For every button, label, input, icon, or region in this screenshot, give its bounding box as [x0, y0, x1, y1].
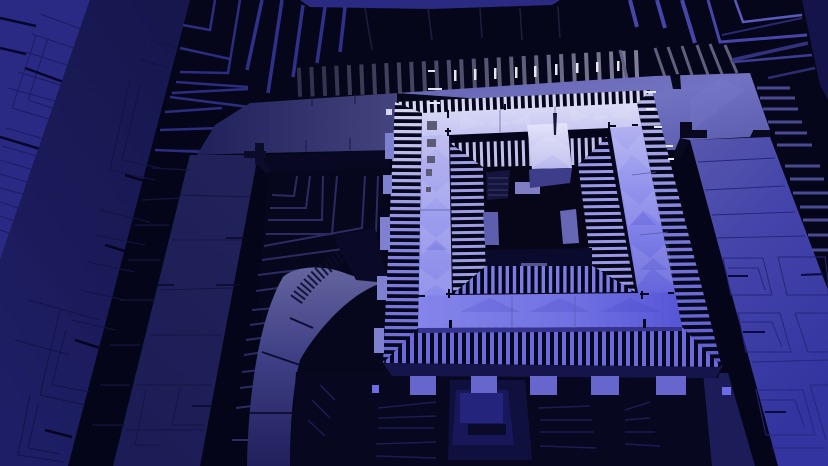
panel: top dark structure with struts	[155, 0, 816, 153]
panel: curved arch	[247, 228, 388, 466]
panel: lit slab top right	[397, 73, 770, 150]
white highlights on strip row	[428, 61, 620, 90]
panel: right lit slab	[690, 137, 828, 466]
top-right gray diagonals	[620, 44, 737, 78]
inner stripe band: left	[468, 140, 470, 298]
inner stripes base	[450, 128, 638, 295]
stripe band: right	[678, 85, 682, 375]
studs on ring	[426, 121, 437, 192]
inner stripe band: bottom	[455, 266, 632, 294]
panel: far left bright band	[0, 0, 90, 260]
strip row above chip	[285, 68, 645, 83]
central cube	[527, 113, 572, 188]
inner block left	[483, 212, 499, 245]
panel: chip	[372, 85, 731, 395]
gap ticks between bands	[92, 150, 200, 425]
panel: bottom chip socket	[290, 372, 755, 466]
panel: chevron struts left of chip	[232, 168, 388, 466]
top-right chevron struts	[630, 0, 815, 78]
white marks top right	[428, 91, 674, 160]
stripe band: bottom	[386, 327, 718, 367]
chip base	[383, 90, 722, 378]
inner stripe band: top	[445, 150, 612, 155]
central well	[483, 165, 591, 266]
ring seams	[420, 106, 668, 328]
ring pyramid facets	[420, 106, 674, 295]
light ring	[418, 103, 682, 333]
inner stripe band: right	[606, 135, 608, 296]
icon: dark cross right	[672, 122, 770, 158]
icon: dark cross left	[244, 143, 274, 176]
stripe band: top	[385, 100, 660, 112]
chip front edge	[383, 363, 722, 378]
ring corner marks	[418, 104, 674, 328]
bottom pads	[372, 376, 731, 395]
inner block right	[560, 209, 579, 244]
side blocks	[374, 109, 394, 353]
panel: second vertical band	[113, 155, 258, 466]
panel: dark left band	[0, 0, 190, 466]
stripe band: left	[400, 95, 402, 375]
panel: far right strips	[757, 0, 828, 250]
panel: horizontal band behind chip	[197, 93, 397, 176]
